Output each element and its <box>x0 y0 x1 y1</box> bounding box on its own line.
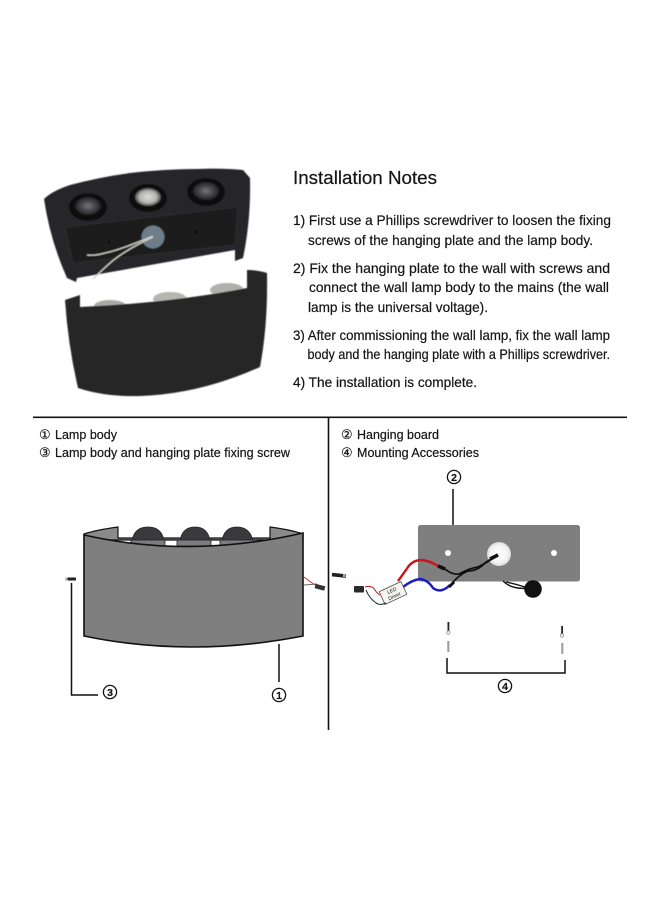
wiring and LED driver <box>354 555 542 604</box>
bracket for 4 <box>447 658 565 673</box>
panel: lamp photo <box>44 169 267 396</box>
loose screw <box>332 573 346 578</box>
legend: left: Lamp body and hanging plate fixing screw <box>55 446 291 460</box>
callout 1: 1 <box>276 690 282 702</box>
step 3: 3) After commissioning the wall lamp, fix the wall lamp <box>293 328 610 343</box>
step 1: 1) First use a Phillips screwdriver to loosen the fixing <box>293 213 611 228</box>
callout 2: 2 <box>451 472 457 484</box>
legend: right: Mounting Accessories <box>357 446 479 460</box>
callout 2 <box>447 470 461 484</box>
step 3 <box>293 328 610 362</box>
mounting screws <box>447 622 564 654</box>
legend: right: ② <box>341 427 353 442</box>
legend: left: ③ <box>39 445 51 460</box>
black twisted wires <box>438 555 528 588</box>
step 1 <box>293 213 611 248</box>
step 2: lamp is the universal voltage). <box>308 300 488 315</box>
lamp front <box>84 533 303 647</box>
title: Installation Notes <box>293 167 437 188</box>
red wire <box>398 560 438 581</box>
callout 1 <box>272 688 286 702</box>
callout 3 <box>103 685 117 699</box>
legend: left: ① <box>39 427 51 442</box>
legend: left <box>39 427 291 460</box>
plug connector <box>354 586 364 592</box>
callout 4: 4 <box>502 681 508 693</box>
step 1: screws of the hanging plate and the lamp body. <box>308 233 593 248</box>
upper half of lamp <box>44 169 250 282</box>
step 2 <box>293 261 610 315</box>
step 4: 4) The installation is complete. <box>293 375 477 390</box>
installation steps <box>293 213 611 390</box>
callout 3: 3 <box>107 687 113 699</box>
lamp back rim <box>84 527 303 540</box>
horizontal divider <box>33 416 627 418</box>
fixing screw <box>65 578 76 580</box>
leader line to 3 <box>72 583 98 695</box>
leader line to 2 <box>452 489 454 525</box>
diagram: hanging board <box>418 525 580 582</box>
step 3: body and the hanging plate with a Phillips screwdriver. <box>308 347 610 362</box>
lamp domes <box>131 527 254 546</box>
round plug <box>524 580 542 598</box>
lower half of lamp <box>65 270 267 396</box>
driver leads <box>365 586 381 595</box>
vertical divider <box>328 417 329 730</box>
LED driver: LED <box>386 586 398 596</box>
step 2: connect the wall lamp body to the mains (the wall <box>309 280 609 295</box>
step 2: 2) Fix the hanging plate to the wall with screws and <box>293 261 610 276</box>
legend: left: Lamp body <box>55 428 118 442</box>
callout 4 <box>498 679 512 693</box>
lamp connector <box>304 577 325 591</box>
legend: right: Hanging board <box>357 428 439 442</box>
LED driver: Driver <box>387 591 402 602</box>
legend: right: ④ <box>341 445 353 460</box>
leader line to 1 <box>278 644 280 682</box>
diagram: lamp body <box>84 527 325 647</box>
blue wire <box>403 579 450 590</box>
legend: right <box>341 427 479 460</box>
LED driver <box>379 582 407 604</box>
